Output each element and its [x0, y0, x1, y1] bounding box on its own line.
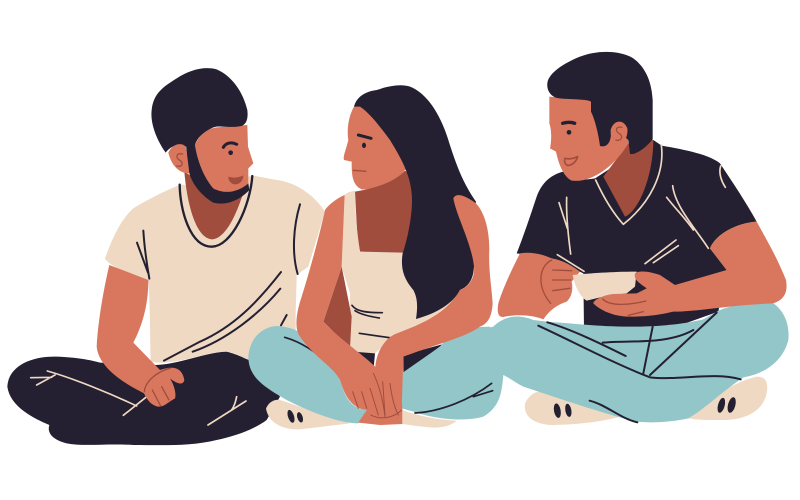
- cream tank top: [342, 191, 463, 353]
- shadowed arm: [323, 267, 352, 348]
- teal left leg: [248, 326, 367, 423]
- finger lines: [144, 368, 170, 406]
- navy t-shirt: [517, 140, 757, 330]
- right arm: [375, 195, 493, 410]
- left arm and hand: [498, 253, 580, 319]
- collar line: [596, 145, 662, 224]
- eyebrow and eye: [358, 135, 371, 138]
- neck and chest: [355, 171, 427, 257]
- leg crease lines: [415, 383, 493, 413]
- left shoe toe marks: [553, 403, 572, 418]
- shirt crease lines: [559, 166, 725, 264]
- head skin: [549, 97, 628, 181]
- trouser crease lines: [31, 371, 246, 425]
- shirt creases: [137, 204, 300, 361]
- hands: [358, 370, 402, 425]
- long hair: [354, 85, 476, 319]
- right shoe: [402, 410, 457, 428]
- eyebrow and eye: [563, 117, 575, 128]
- neck: [603, 140, 653, 217]
- face: [344, 103, 420, 189]
- left arm: [296, 195, 397, 410]
- left shoe: [525, 392, 620, 425]
- person: woman with long black hair: [248, 85, 503, 429]
- bowl: [573, 272, 637, 301]
- beard: [186, 145, 249, 204]
- leg seam lines: [538, 313, 741, 422]
- navy trousers under arms: [353, 344, 443, 374]
- teal legs: [480, 303, 789, 422]
- finger lines: [353, 373, 402, 418]
- collar lines: [180, 176, 252, 247]
- person: man in navy t-shirt with bowl: [480, 52, 789, 425]
- teal right leg: [402, 327, 503, 419]
- chopstick: [557, 255, 584, 271]
- top crease lines: [352, 305, 392, 338]
- thumb lines: [603, 299, 646, 315]
- hair: [547, 52, 653, 154]
- head skin: [195, 125, 253, 192]
- navy trousers: [7, 352, 280, 445]
- right arm and hand: [593, 222, 787, 317]
- arm and hand: [97, 265, 184, 407]
- person: bearded man in cream t-shirt: [7, 68, 325, 445]
- neck: [184, 172, 247, 239]
- mouth: [228, 175, 243, 184]
- hair: [151, 68, 248, 153]
- mouth: [353, 168, 366, 173]
- mouth: [565, 157, 578, 165]
- cream t-shirt: [105, 175, 325, 363]
- left shoe: [266, 400, 350, 429]
- ear: [168, 144, 191, 173]
- hand lines: [541, 260, 572, 303]
- right shoe: [688, 377, 767, 420]
- eyebrow and eye: [223, 143, 237, 147]
- ear: [611, 122, 627, 147]
- right shoe toe marks: [716, 396, 737, 414]
- shoe toe marks: [286, 409, 304, 424]
